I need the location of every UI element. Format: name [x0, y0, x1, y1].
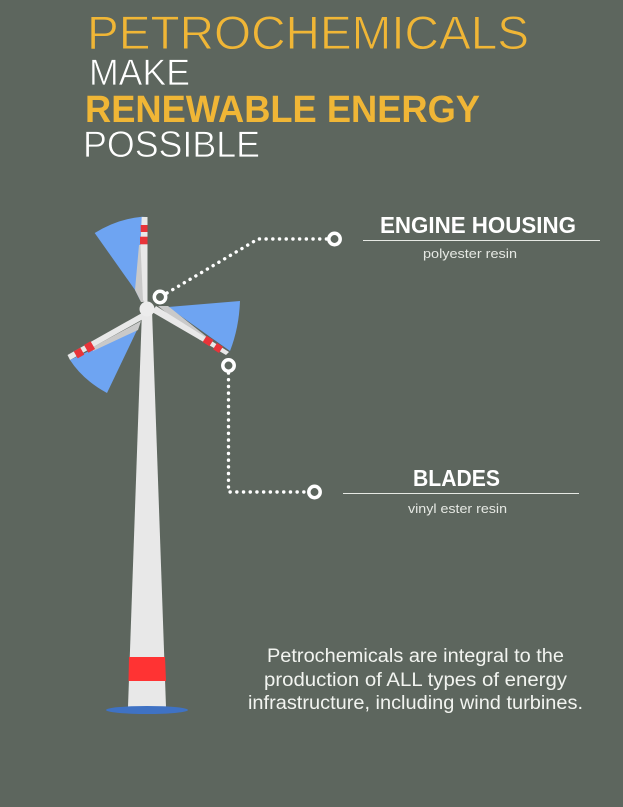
body text: infrastructure, including wind turbines.: [248, 693, 583, 714]
title: PETROCHEMICALS: [87, 6, 529, 59]
left blade: [68, 313, 145, 393]
label: blades: vinyl ester resin: [408, 501, 507, 516]
title: POSSIBLE: [83, 124, 260, 165]
title: [83, 6, 529, 165]
callout connector: engine housing: [154, 233, 340, 303]
tower red band: [128, 657, 166, 681]
label: engine housing: ENGINE HOUSING: [380, 212, 576, 238]
body text: [248, 646, 583, 714]
body text: Petrochemicals are integral to the: [267, 646, 564, 667]
title: RENEWABLE ENERGY: [85, 89, 480, 131]
hub: [140, 302, 154, 316]
body text: production of ALL types of energy: [264, 670, 568, 691]
title: MAKE: [89, 52, 190, 93]
tower: [128, 310, 166, 707]
top blade: [95, 217, 148, 305]
label: engine housing: [363, 212, 600, 261]
tower base: [106, 706, 188, 714]
label: blades: BLADES: [413, 465, 500, 491]
right blade: [152, 301, 240, 355]
callout connector: blades: [223, 360, 320, 498]
label: engine housing: polyester resin: [423, 246, 517, 261]
label: blades: [343, 465, 579, 516]
wind turbine: [68, 217, 240, 714]
